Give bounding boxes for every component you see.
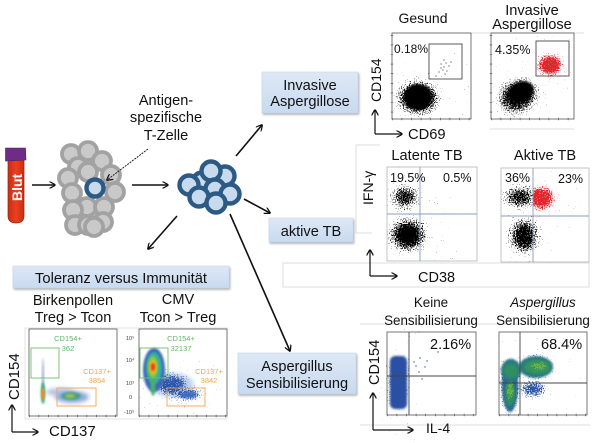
heading: Aktive TB: Aktive TB: [514, 148, 576, 164]
log scale ticks: 10⁴: [126, 357, 135, 364]
flow plot: Aspergillus Sensibilisierung: [499, 332, 587, 415]
flow plot: CMV: [124, 329, 227, 416]
heading: Latente TB: Latente TB: [391, 148, 463, 164]
axis label: CD154: CD154: [368, 58, 384, 102]
heading: Invasive Aspergillose: [492, 3, 572, 33]
percentage: 68.4%: [541, 337, 582, 353]
gate label CD137: CD137+: [195, 367, 223, 376]
log scale ticks: 10⁵: [126, 335, 134, 342]
percentages: 19.5%: [390, 171, 425, 185]
label box: tolerance versus immunity: [13, 266, 229, 288]
flow plot: Invasive Aspergillose: [491, 33, 574, 119]
gate label CD154: [167, 334, 195, 353]
axis arrow: horizontal: [370, 275, 397, 277]
log scale ticks: -10³: [124, 410, 134, 416]
heading: Invasive Aspergillose: Invasive: [505, 3, 559, 19]
gate label CD154: 32137: [171, 344, 191, 353]
arrow: to tolerance: [148, 216, 177, 249]
heading: CMV Tcon > Treg: CMV: [162, 292, 194, 308]
label: antigen-specific T cell: Antigen-: [139, 93, 193, 109]
gate label CD137: 3854: [89, 376, 105, 385]
percentage: 0.18%: [394, 42, 428, 56]
gate label CD154: CD154+: [167, 334, 195, 343]
dashed arrow to T cell: [107, 149, 148, 180]
icon: blood tube: [6, 148, 26, 223]
flow plot: Latente TB: 0.5%: [443, 171, 472, 185]
flow plot: Gesund: [392, 33, 471, 119]
heading: Gesund: Gesund: [398, 10, 448, 26]
heading: Keine Sensibilisierung: Keine: [414, 295, 448, 310]
gate label CD154: [54, 334, 82, 353]
label: antigen-specific T cell: [130, 93, 202, 144]
label box: aspergillus sensitisation: Aspergillus: [261, 359, 333, 375]
axis label: CD38: CD38: [418, 270, 455, 286]
axis arrow: vertical: [369, 250, 371, 276]
label box: active TB: aktive TB: [281, 224, 341, 240]
gate label CD154: 362: [62, 344, 74, 353]
gate label CD137: [83, 367, 111, 385]
percentages: 36%: [505, 171, 530, 185]
heading: Aspergillus Sensibilisierung: [496, 295, 590, 328]
heading: Aspergillus Sensibilisierung: Aspergillus: [509, 295, 576, 310]
axis arrow: vertical: [374, 110, 376, 134]
log scale ticks: 0: [129, 395, 132, 401]
axis arrow: vertical: [372, 393, 374, 430]
heading: Keine Sensibilisierung: Sensibilisierung: [384, 313, 478, 328]
gate label CD137: CD137+: [83, 367, 111, 376]
gate label CD137: [195, 367, 223, 385]
label box: invasive aspergillosis: Invasive: [283, 78, 337, 94]
axis label: CD154: CD154: [367, 340, 383, 385]
frame around tolerance plots: [25, 328, 227, 419]
gate label CD154: CD154+: [54, 334, 82, 343]
antigen-specific cell: [86, 180, 104, 196]
label box: aspergillus sensitisation: Sensibilisierung: [246, 376, 348, 392]
heading: Keine Sensibilisierung: [384, 295, 478, 328]
flow plot: Aktive TB: 23%: [558, 172, 583, 186]
arrow: to invasive aspergillosis: [236, 125, 262, 156]
heading: Birkenpollen Treg > Tcon: Birkenpollen: [33, 293, 113, 309]
heading: Birkenpollen Treg > Tcon: Treg > Tcon: [35, 310, 111, 326]
tube label: Blut: [9, 173, 25, 201]
label box: tolerance versus immunity: Toleranz versus Immunität: [35, 271, 207, 287]
arrow: to active TB: [244, 199, 270, 213]
axis label: CD137: CD137: [49, 423, 96, 440]
arrow: blood to cells: [32, 184, 55, 186]
gate label CD137: 3842: [201, 376, 217, 385]
arrow: to aspergillus sensitisation: [230, 214, 290, 351]
label box: aspergillus sensitisation: [238, 353, 356, 394]
heading: CMV Tcon > Treg: [140, 292, 216, 326]
flow plot: Keine Sensibilisierung: [387, 332, 476, 415]
axis label: IL-4: IL-4: [426, 420, 450, 436]
axis arrow: horizontal: [12, 431, 38, 433]
flow plot: Birkenpollen: [29, 329, 117, 416]
heading: CMV Tcon > Treg: Tcon > Treg: [140, 310, 216, 326]
label: antigen-specific T cell: T-Zelle: [144, 128, 188, 144]
axis label: CD154: CD154: [6, 353, 23, 400]
label box: active TB: [269, 218, 353, 242]
blue expanded T-cell cluster: [180, 162, 240, 212]
arrow: to expanded cells: [132, 184, 168, 186]
axis arrow: vertical: [11, 405, 13, 432]
log scale ticks: 10³: [126, 381, 134, 387]
faint slide frame lines: [283, 33, 590, 425]
flow plot: Aktive TB: [501, 168, 589, 262]
axis label: CD69: CD69: [408, 127, 446, 143]
percentage: 4.35%: [495, 43, 530, 57]
log scale ticks: [124, 335, 135, 416]
heading: Birkenpollen Treg > Tcon: [33, 293, 113, 326]
label box: invasive aspergillosis: Aspergillose: [270, 94, 350, 110]
heading: Aspergillus Sensibilisierung: Sensibilisierung: [496, 313, 590, 328]
label box: invasive aspergillosis: [262, 72, 358, 113]
percentage: 2.16%: [430, 337, 471, 353]
gray T-cell cluster: [59, 142, 124, 236]
axis label: IFN-gamma: IFN-γ: [360, 171, 376, 205]
axis arrow: horizontal: [375, 133, 402, 135]
axis arrow: horizontal: [373, 429, 413, 431]
label: antigen-specific T cell: spezifische: [130, 110, 202, 126]
flow plot: Latente TB: [387, 167, 477, 261]
heading: Invasive Aspergillose: Aspergillose: [492, 17, 572, 33]
